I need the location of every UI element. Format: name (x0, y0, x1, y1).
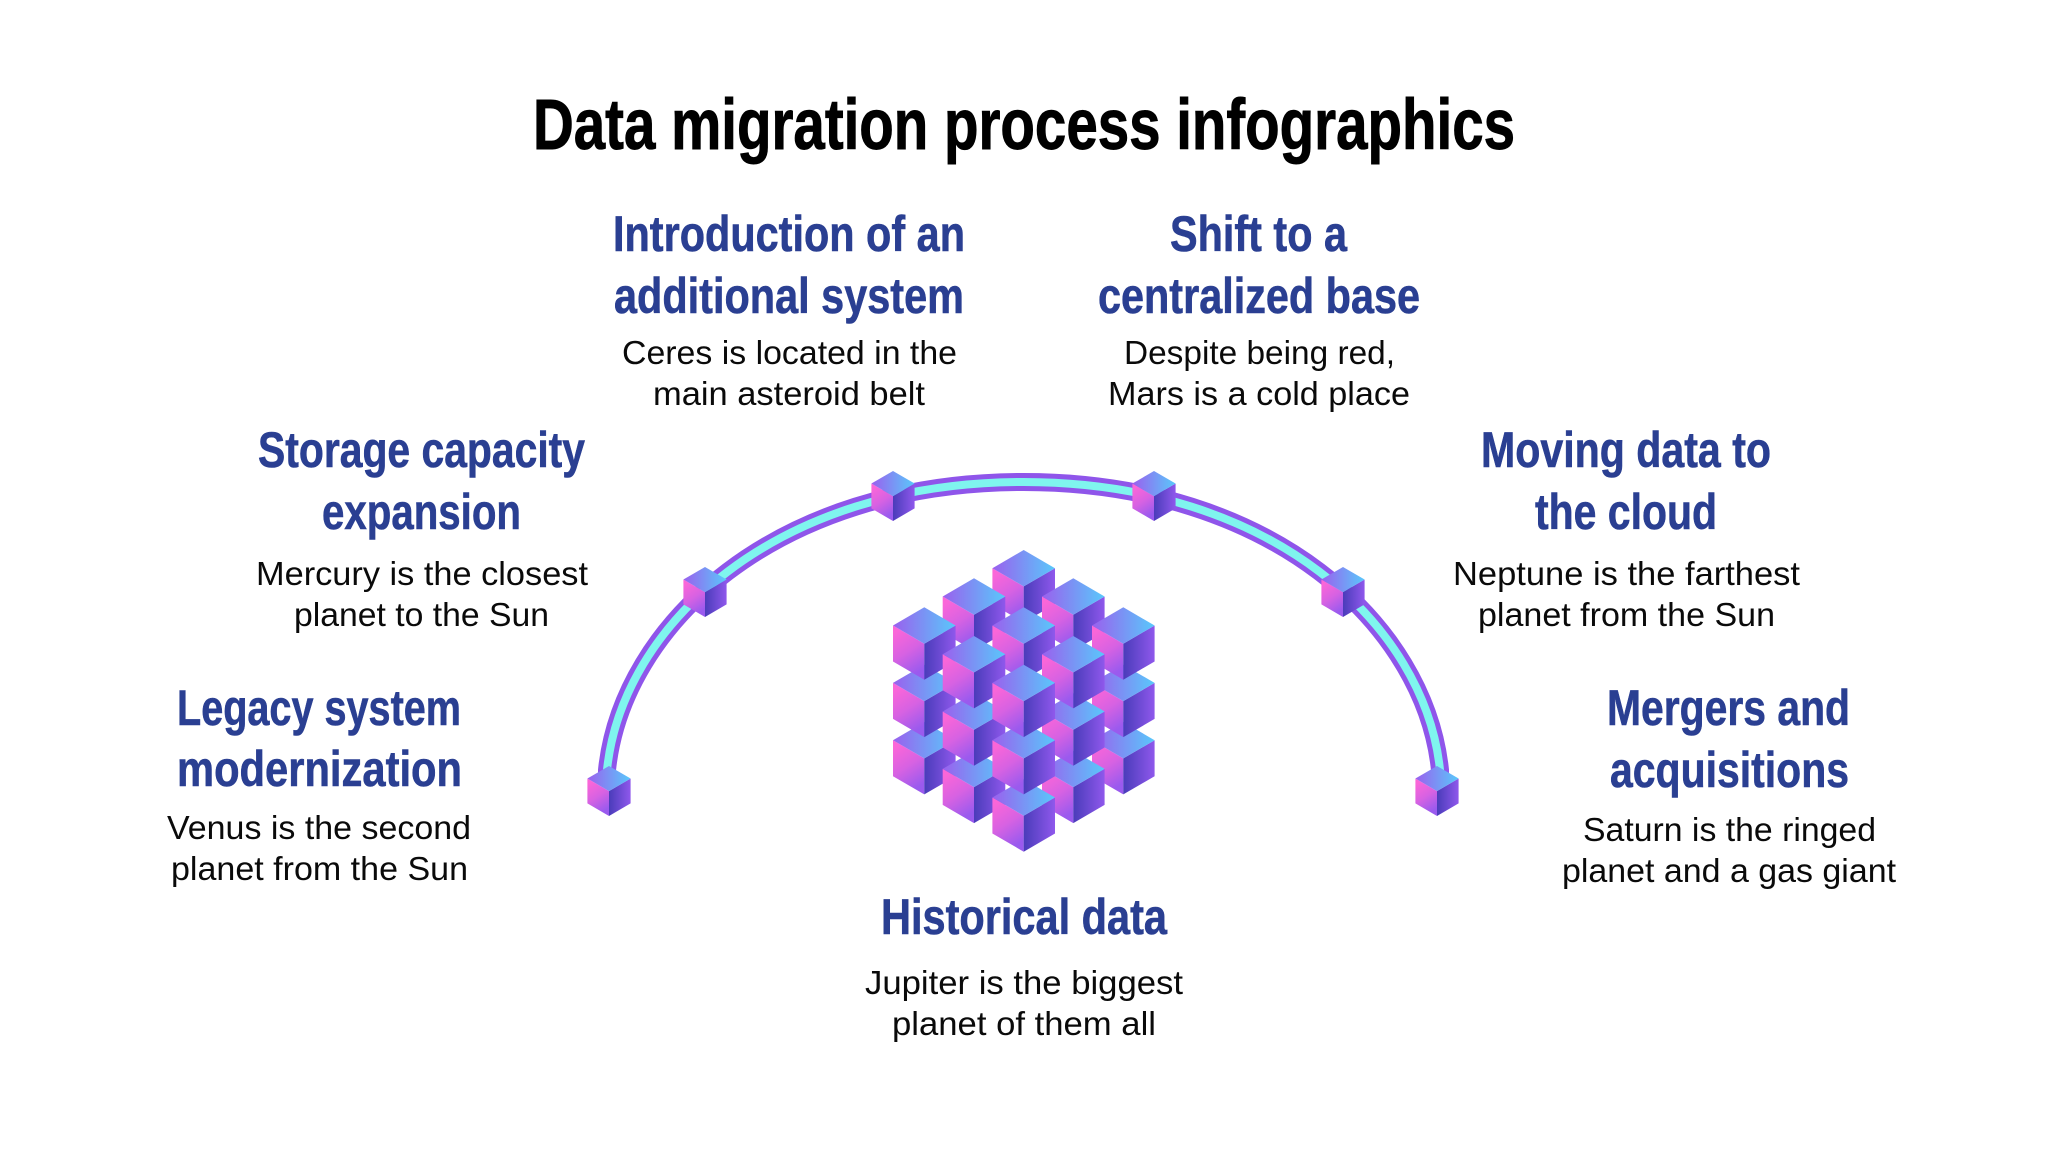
heading: Mergers and (1607, 680, 1850, 736)
text block (1562, 812, 1897, 890)
icon: central isometric cube cluster (893, 550, 1155, 852)
text block: Venus is the second (167, 810, 471, 847)
heading: the cloud (1535, 484, 1717, 540)
text block (167, 810, 471, 888)
icon: node cube 1 (587, 766, 631, 816)
panel: shift to a centralized base (1098, 206, 1420, 413)
text block (1108, 335, 1410, 413)
heading: additional system (614, 268, 964, 324)
text block (256, 556, 589, 634)
heading (258, 422, 585, 540)
text block: Despite being red, (1124, 335, 1395, 372)
text block: planet of them all (892, 1006, 1156, 1043)
heading: centralized base (1098, 268, 1420, 324)
text block (865, 965, 1184, 1043)
heading: Introduction of an (613, 206, 965, 262)
heading: Historical data (881, 889, 1168, 945)
text block: Jupiter is the biggest (865, 965, 1184, 1002)
text block: Ceres is located in the (622, 335, 957, 372)
chart: arc connecting the data cubes (607, 482, 1440, 775)
panel: historical data (865, 889, 1184, 1043)
heading: acquisitions (1610, 742, 1849, 798)
heading: expansion (322, 484, 521, 540)
panel: introduction of an additional system (613, 206, 965, 413)
panel: legacy system modernization (167, 680, 471, 888)
text block: planet from the Sun (1478, 597, 1775, 634)
heading (613, 206, 965, 324)
text block: Mercury is the closest (256, 556, 589, 593)
heading (1607, 680, 1850, 798)
panel: moving data to the cloud (1453, 422, 1801, 634)
text block (622, 335, 957, 413)
text block: Neptune is the farthest (1453, 556, 1801, 593)
heading: Storage capacity (258, 422, 585, 478)
icon: node cube 6 (1415, 766, 1459, 816)
text block: planet to the Sun (294, 597, 549, 634)
title: Data migration process infographics (533, 86, 1515, 165)
panel: mergers and acquisitions (1562, 680, 1897, 890)
heading: modernization (177, 741, 462, 797)
icon: node cube 4 (1132, 471, 1176, 521)
heading: Legacy system (177, 680, 461, 736)
text block: Saturn is the ringed (1583, 812, 1876, 849)
panel: storage capacity expansion (256, 422, 589, 634)
text block: planet from the Sun (171, 851, 468, 888)
heading (177, 680, 462, 797)
heading: Moving data to (1481, 422, 1771, 478)
text block (1453, 556, 1801, 634)
text block: main asteroid belt (653, 376, 926, 413)
icon: node cube 5 (1321, 567, 1365, 617)
heading (1098, 206, 1420, 324)
heading (1481, 422, 1771, 540)
text block: Mars is a cold place (1108, 376, 1410, 413)
icon: node cube 3 (871, 471, 915, 521)
icon: node cube 2 (683, 567, 727, 617)
heading: Shift to a (1170, 206, 1348, 262)
text block: planet and a gas giant (1562, 853, 1897, 890)
